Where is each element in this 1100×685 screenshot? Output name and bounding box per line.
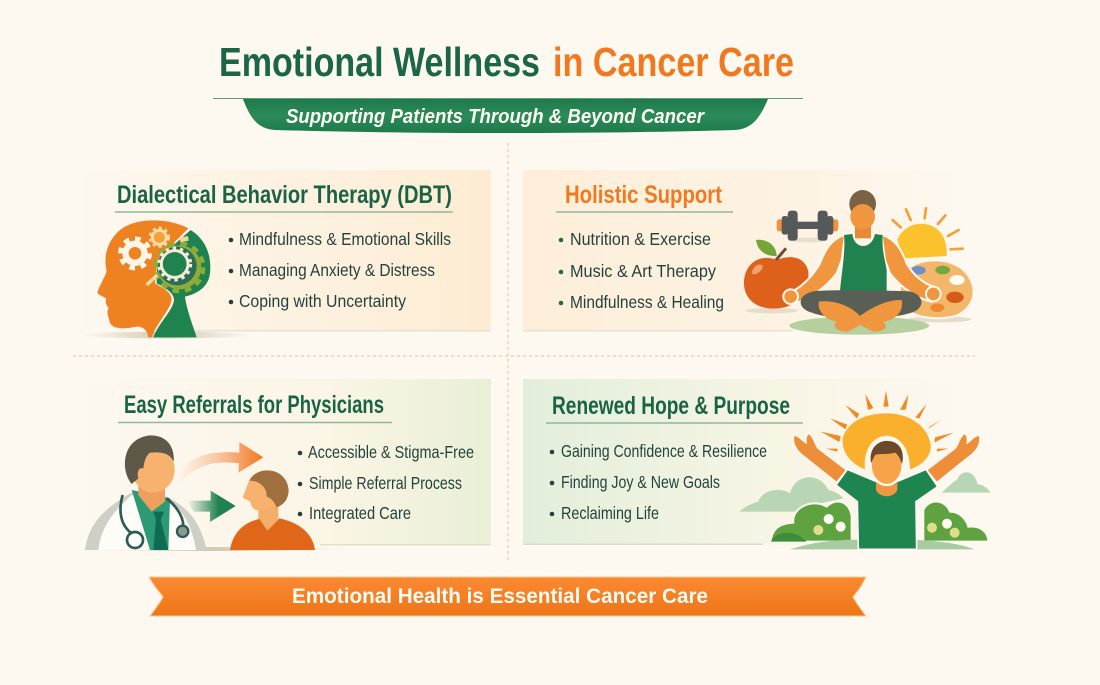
bullet list: referrals — [298, 442, 474, 523]
subtitle banner — [213, 98, 803, 133]
bullet list: hope: Reclaiming Life — [561, 503, 659, 523]
bullet list: holistic — [559, 229, 724, 312]
bullet list: referrals: Accessible & Stigma-Free — [308, 442, 474, 462]
title: in Cancer Care — [553, 39, 794, 85]
figure: meditating person — [783, 190, 941, 335]
figure: patient — [230, 470, 315, 550]
title — [219, 39, 794, 85]
icon: apple — [744, 240, 809, 313]
icon: clouds — [739, 472, 991, 512]
title: Emotional Wellness — [219, 39, 540, 85]
bullet list: referrals: Integrated Care — [309, 503, 411, 523]
figure: doctor — [85, 435, 207, 550]
bullet list: DBT: Managing Anxiety & Distress — [239, 260, 435, 280]
panel: renewed hope and purpose — [523, 379, 991, 549]
bullet list: hope: Gaining Confidence & Resilience — [561, 441, 767, 461]
footer ribbon: Emotional Health is Essential Cancer Care — [292, 584, 708, 608]
bullet list: holistic: Mindfulness & Healing — [570, 292, 724, 312]
arrow: green to patient — [187, 491, 236, 522]
bullet list: hope — [550, 441, 767, 523]
bullet list: holistic: Music & Art Therapy — [570, 261, 716, 281]
illustration: meditating person with apple, dumbbell, sun and palette — [744, 190, 974, 335]
arrow: orange curved referral — [177, 442, 263, 483]
heading: holistic support: Holistic Support — [565, 181, 723, 209]
bullet list: referrals: Simple Referral Process — [309, 473, 462, 493]
bullet list: holistic: Nutrition & Exercise — [570, 229, 711, 249]
heading: renewed hope: Renewed Hope & Purpose — [552, 392, 790, 420]
bullet list: hope: Finding Joy & New Goals — [561, 472, 720, 492]
panel: easy referrals for physicians — [73, 379, 491, 551]
icon: sunrise — [821, 391, 953, 469]
heading: referrals: Easy Referrals for Physicians — [124, 391, 384, 419]
bullet list: DBT: Mindfulness & Emotional Skills — [239, 229, 451, 249]
icon: head with gears — [80, 220, 253, 338]
icon: palette — [900, 260, 974, 322]
bullet list: DBT: Coping with Uncertainty — [239, 291, 406, 311]
icon: dumbbell — [777, 211, 838, 242]
illustration: doctor referring patient — [77, 435, 343, 551]
illustration: person with raised arms and sunrise — [739, 391, 991, 549]
panel: dialectical behavior therapy — [73, 170, 491, 338]
panel: holistic support — [523, 170, 974, 335]
heading: DBT: Dialectical Behavior Therapy (DBT) — [117, 181, 452, 209]
subtitle banner: Supporting Patients Through & Beyond Cancer — [286, 105, 705, 128]
icon: sun — [893, 208, 963, 258]
footer ribbon — [149, 577, 866, 616]
bullet list: DBT — [229, 229, 451, 311]
figure: person with raised arms — [793, 433, 980, 549]
icon: bushes with flowers — [771, 501, 988, 549]
